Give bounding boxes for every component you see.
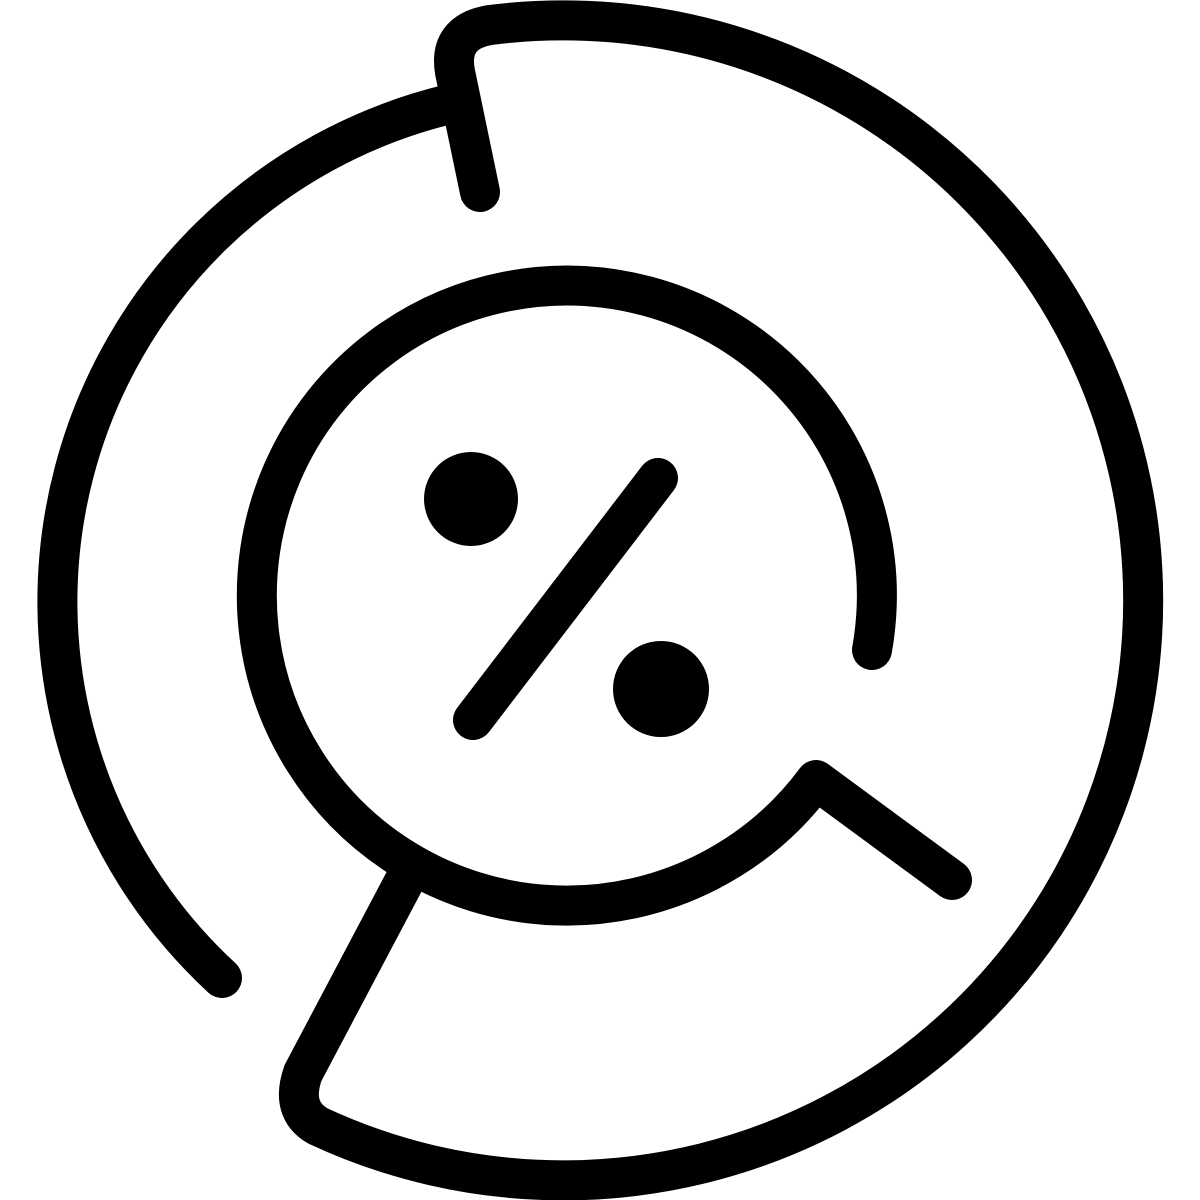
- percent dots: [424, 452, 709, 737]
- left outer arc: [57, 104, 450, 978]
- big outer arc with handle: [299, 20, 1143, 1180]
- percent slash: [473, 478, 658, 720]
- inner magnifier circle with tail: [257, 286, 952, 906]
